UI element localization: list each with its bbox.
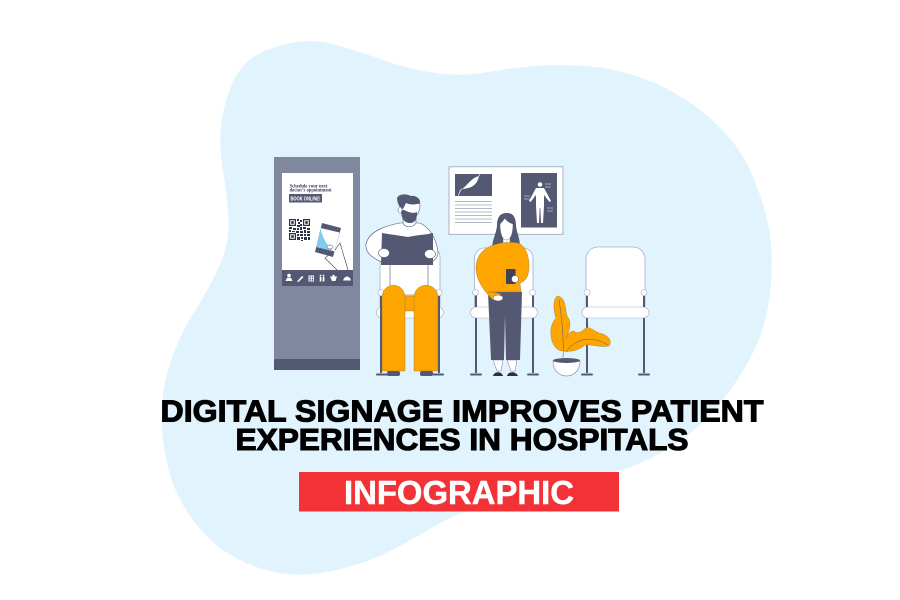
kiosk screen: BOOK ONLINE! — [290, 196, 321, 202]
woman hands — [512, 276, 518, 282]
woman sweater — [476, 242, 529, 300]
kiosk — [160, 157, 764, 512]
chair: woman — [470, 248, 538, 374]
empty chair — [582, 247, 649, 374]
man torso — [366, 223, 438, 295]
man shoes — [387, 371, 400, 376]
man reading — [366, 194, 438, 376]
title — [160, 394, 764, 457]
potted plant — [551, 296, 610, 376]
poster image: body chart — [521, 173, 557, 228]
woman shoes — [493, 372, 518, 376]
woman neck — [503, 236, 510, 246]
poster image: organ — [455, 174, 492, 196]
title: EXPERIENCES IN HOSPITALS — [236, 422, 688, 457]
phone in hand — [315, 223, 348, 270]
kiosk screen — [282, 173, 353, 270]
chair: man — [376, 247, 444, 374]
kiosk icon strip — [282, 270, 353, 286]
kiosk screen: Schedule your next — [290, 184, 328, 190]
man trousers — [405, 296, 415, 311]
woman with phone — [476, 213, 529, 376]
woman legs — [493, 360, 517, 371]
man head — [403, 212, 416, 227]
QR code — [289, 219, 310, 241]
title: DIGITAL SIGNAGE IMPROVES PATIENT — [160, 394, 764, 428]
wall poster — [449, 167, 563, 234]
woman trousers — [488, 292, 522, 360]
plant leaves — [551, 296, 610, 351]
plant pot — [553, 361, 580, 376]
infographic banner: INFOGRAPHIC — [344, 474, 574, 511]
man hands — [378, 248, 390, 258]
background blob — [161, 41, 772, 575]
infographic banner — [299, 472, 619, 512]
kiosk screen: doctor's appointment — [290, 188, 332, 194]
woman face — [500, 218, 513, 240]
poster text lines — [455, 202, 492, 222]
woman hair — [492, 213, 520, 247]
woman phone — [506, 269, 516, 284]
man newspaper — [381, 233, 433, 265]
